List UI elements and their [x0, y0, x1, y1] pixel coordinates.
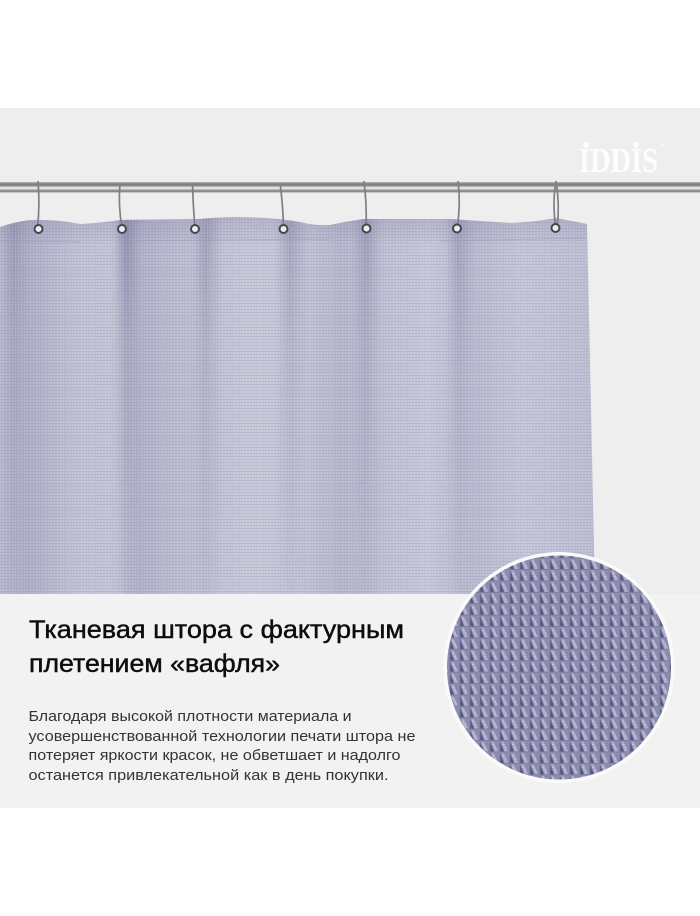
curtain	[0, 215, 596, 595]
heading	[29, 616, 404, 678]
fold shadows	[0, 215, 475, 595]
curtain hooks and grommets	[34, 181, 560, 233]
body text	[28, 709, 415, 784]
body text: останется привлекательной как в день покупки.	[28, 768, 388, 784]
heading: плетением «вафля»	[29, 650, 280, 678]
heading: Тканевая штора с фактурным	[29, 616, 404, 644]
lower text panel	[0, 594, 700, 808]
detail circle: waffle weave close-up	[444, 552, 674, 783]
curtain rod	[0, 182, 700, 192]
body text: Благодаря высокой плотности материала и	[28, 709, 352, 725]
body text: усовершенствованной технологии печати штора не	[28, 729, 415, 745]
body text: потеряет яркости красок, не обветшает и надолго	[28, 748, 400, 764]
background panel: product photo	[0, 108, 700, 594]
logo: iddis: IDDIS	[579, 141, 658, 180]
